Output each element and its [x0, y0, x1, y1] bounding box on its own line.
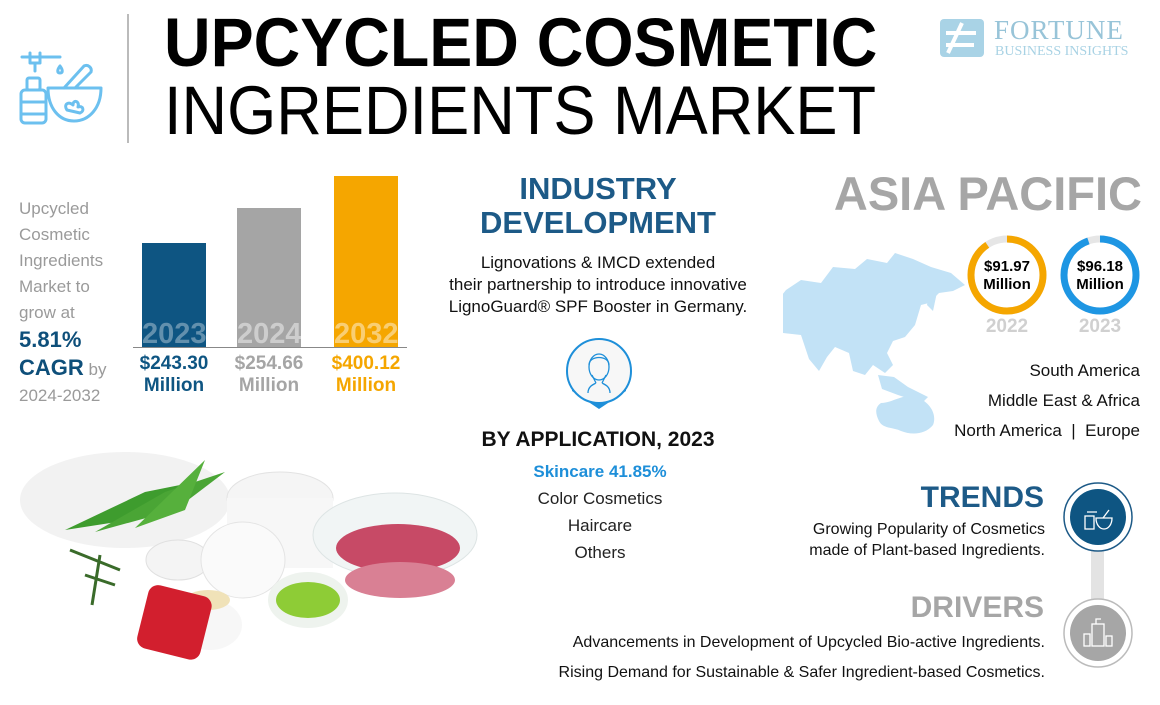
bar chart: $400.12 — [332, 353, 400, 374]
text block: CAGR: 5.81% — [19, 327, 81, 352]
text block: CAGR — [19, 199, 106, 405]
text: drivers: Rising Demand for Sustainable & Safer Ingredient-based Cosmetics. — [559, 664, 1045, 681]
bar chart: 2032 — [334, 318, 399, 350]
divider line — [127, 14, 129, 143]
map: asia pacific — [783, 253, 965, 434]
text block: CAGR: Ingredients — [19, 251, 103, 270]
heading: drivers: DRIVERS — [911, 591, 1044, 624]
list: regions: North America | Europe — [954, 421, 1140, 440]
text: trends: made of Plant-based Ingredients. — [809, 542, 1045, 559]
title: INGREDIENTS MARKET — [164, 72, 876, 149]
text block: CAGR: grow at — [19, 303, 75, 322]
text: drivers: Advancements in Development of Upcycled Bio-active Ingredients. — [573, 634, 1045, 651]
list: applications: Haircare — [568, 516, 632, 535]
ring: 2022: 2022 — [986, 316, 1028, 337]
text block: CAGR: 2024-2032 — [19, 386, 100, 405]
ring: 2022: $91.97 — [984, 258, 1030, 275]
ring: 2022: Million — [983, 276, 1031, 293]
text block: CAGR: Market to — [19, 277, 90, 296]
text: drivers — [559, 634, 1045, 681]
text block: CAGR: Upcycled — [19, 199, 89, 218]
list: applications — [533, 462, 667, 562]
ring: 2023: $96.18 — [1077, 258, 1123, 275]
heading: by application: BY APPLICATION, 2023 — [481, 428, 714, 451]
ring: 2022 — [968, 236, 1046, 337]
text: industry development — [449, 253, 747, 316]
logo — [940, 15, 1128, 59]
ring: 2023: 2023 — [1079, 316, 1121, 337]
icon: trends circle — [1063, 482, 1133, 552]
bar chart: 2024 — [237, 318, 302, 350]
text block: CAGR: Cosmetic — [19, 225, 90, 244]
bar chart: Million — [336, 375, 396, 396]
heading: trends: TRENDS — [921, 481, 1044, 514]
text: trends: Growing Popularity of Cosmetics — [813, 521, 1045, 538]
list: regions: South America — [1029, 361, 1140, 380]
heading: industry development: INDUSTRY — [519, 171, 677, 206]
bar chart: $254.66 — [235, 353, 303, 374]
icon: drivers circle — [1063, 598, 1133, 668]
text block: CAGR: CAGR by — [19, 355, 106, 380]
connector — [1091, 545, 1104, 615]
bar chart: Million — [239, 375, 299, 396]
icon: face skincare — [566, 338, 632, 409]
ring: 2023: Million — [1076, 276, 1124, 293]
heading: asia pacific: ASIA PACIFIC — [834, 167, 1142, 220]
bar chart — [133, 176, 407, 396]
photo: cosmetic ingredients — [20, 452, 478, 660]
list: applications: Skincare 41.85% — [533, 462, 667, 481]
heading: industry development — [480, 171, 716, 240]
list: regions — [954, 361, 1140, 440]
list: regions: Middle East & Africa — [988, 391, 1140, 410]
text: industry development: their partnership to introduce innovative — [449, 275, 747, 294]
icon: cosmetic ingredients — [20, 52, 102, 124]
ring: 2023 — [1060, 236, 1140, 337]
bar chart: 2023 — [142, 318, 207, 350]
bar chart: Million — [144, 375, 204, 396]
list: applications: Color Cosmetics — [538, 489, 662, 508]
title — [164, 4, 877, 149]
title: UPCYCLED COSMETIC — [164, 4, 877, 81]
logo: FORTUNE — [994, 15, 1124, 45]
text: trends — [809, 521, 1045, 559]
text: industry development: Lignovations & IMCD extended — [481, 253, 715, 272]
logo: BUSINESS INSIGHTS — [995, 44, 1128, 59]
text: industry development: LignoGuard® SPF Booster in Germany. — [449, 297, 747, 316]
list: applications: Others — [574, 543, 626, 562]
heading: industry development: DEVELOPMENT — [480, 205, 716, 240]
bar chart: $243.30 — [140, 353, 208, 374]
